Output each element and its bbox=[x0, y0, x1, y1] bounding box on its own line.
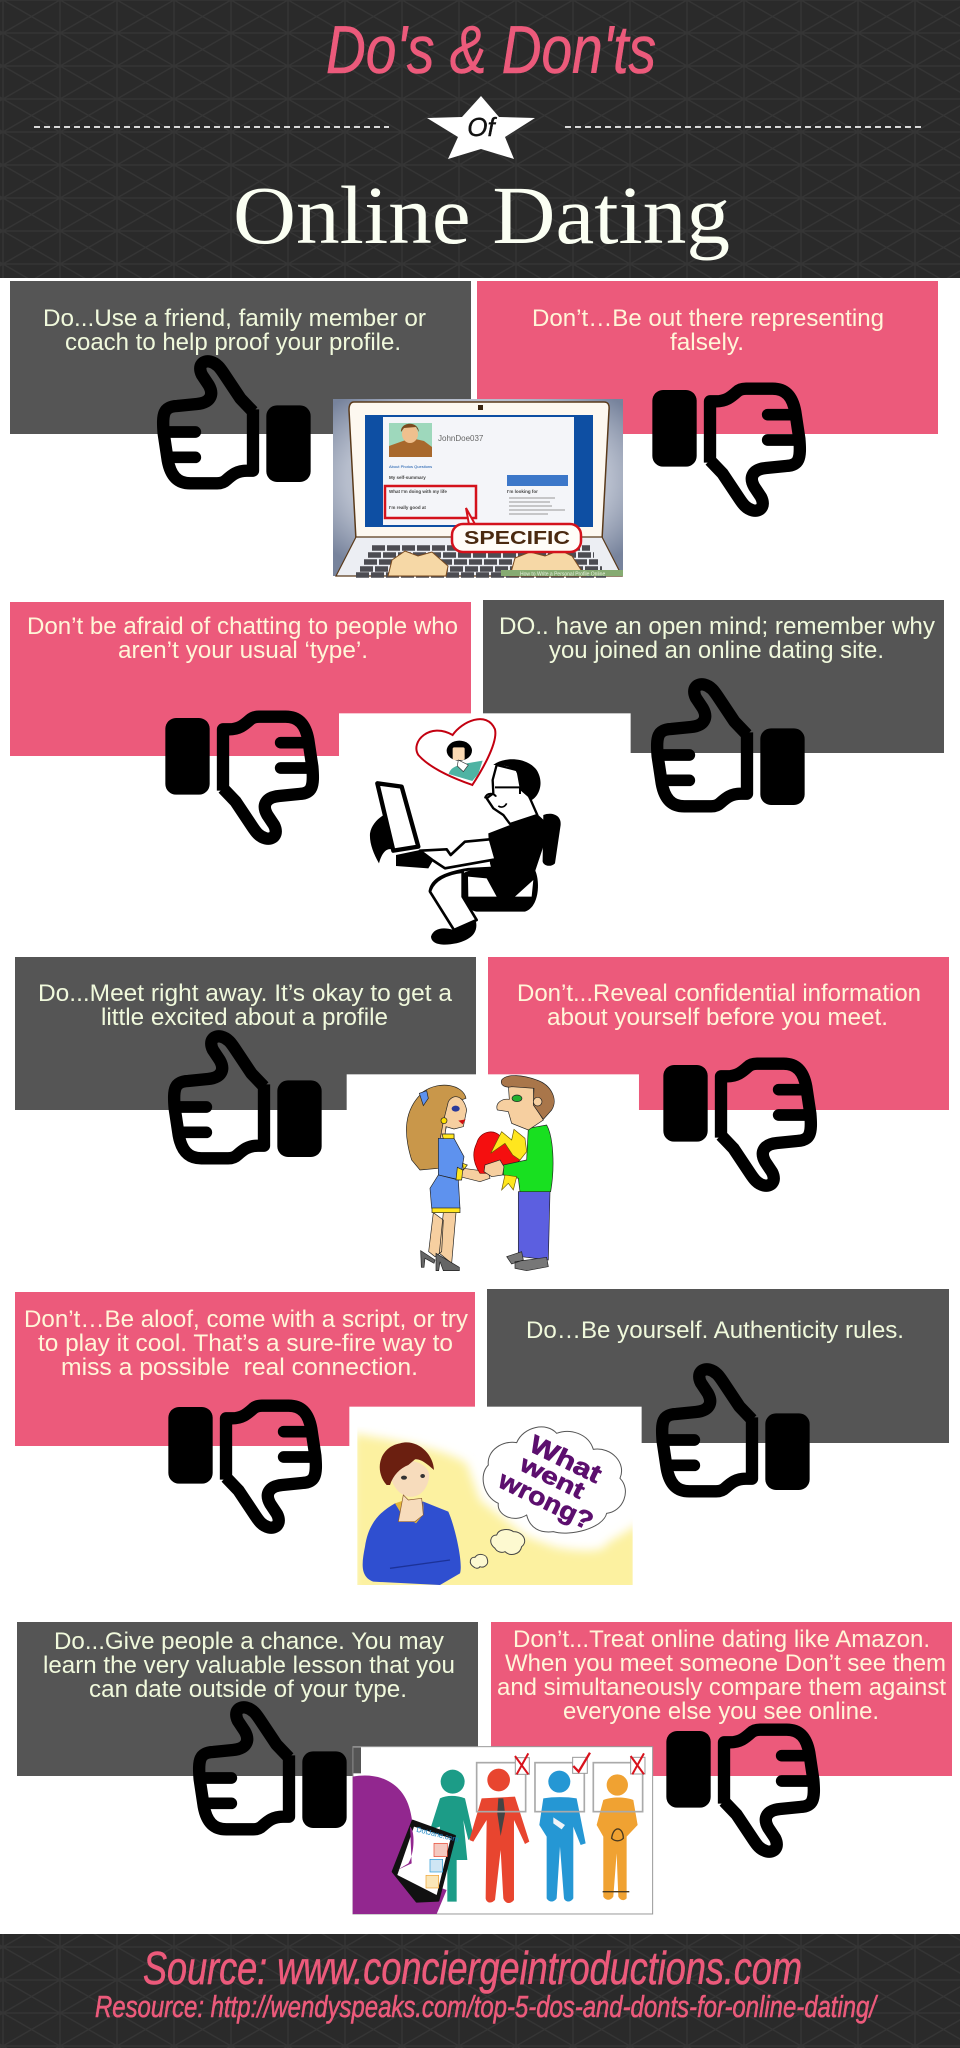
illustration: laptop with profile: My self-summary bbox=[389, 475, 426, 480]
illustration: couple exchanging a heart gift bbox=[347, 1074, 639, 1274]
panel: don't, be aloof bbox=[15, 1292, 475, 1446]
panel: don't, representing falsely: Don’t…Be out there representing bbox=[532, 305, 884, 332]
illustration: laptop with profile: I'm really good at bbox=[389, 505, 426, 510]
panel: do, give people a chance: can date outside of your type. bbox=[89, 1676, 407, 1703]
panel: don't, confidential information: Don’t...Reveal confidential information bbox=[517, 980, 921, 1007]
icon: thumbs down bbox=[663, 1064, 811, 1186]
panel: do, meet right away: little excited about a profile bbox=[101, 1004, 388, 1031]
icon: thumbs down bbox=[168, 1406, 316, 1528]
illustration: thinking man, what went wrong: went bbox=[515, 1450, 589, 1504]
panel: do, open mind: DO.. have an open mind; remember why bbox=[499, 613, 935, 640]
panel: don't, chatting: Don’t be afraid of chatting to people who bbox=[27, 613, 458, 640]
row 3 bbox=[15, 957, 949, 1274]
star badge with Of bbox=[427, 96, 535, 159]
panel: do, open mind: you joined an online dating site. bbox=[549, 637, 884, 664]
illustration: thinking man, what went wrong: wrong? bbox=[493, 1466, 598, 1536]
illustration: laptop with profile: What I'm doing with my life bbox=[389, 489, 447, 494]
panel: don't, representing falsely: falsely. bbox=[670, 329, 744, 356]
illustration: thinking man, what went wrong bbox=[349, 1407, 642, 1593]
illustration: laptop with profile: I'm looking for bbox=[507, 489, 538, 494]
icon: thumbs down bbox=[666, 1730, 814, 1852]
title: Online Dating: Online Dating bbox=[233, 169, 730, 261]
panel: don't, representing falsely bbox=[477, 281, 938, 434]
panel: don't, treat dating like Amazon: everyone else you see online. bbox=[563, 1698, 879, 1725]
panel: do, proof your profile bbox=[10, 281, 471, 434]
illustration: man at computer dreaming of a date bbox=[339, 713, 631, 947]
row 5 bbox=[17, 1622, 952, 1914]
icon: thumbs down bbox=[652, 389, 800, 511]
panel: don't, treat dating like Amazon: Don’t...Treat online dating like Amazon. bbox=[513, 1626, 930, 1653]
panel: do, give people a chance: Do...Give people a chance. You may bbox=[54, 1628, 444, 1655]
title: Do's & Don'ts: Do's & Don'ts bbox=[326, 12, 656, 88]
panel: don't, chatting: aren’t your usual ‘type’. bbox=[118, 637, 368, 664]
panel: do, be yourself: Do…Be yourself. Authenticity rules. bbox=[526, 1317, 904, 1344]
header band bbox=[0, 0, 960, 278]
left dashed divider bbox=[34, 126, 389, 128]
star badge with Of: Of bbox=[467, 112, 497, 142]
panel: do, proof your profile: coach to help proof your profile. bbox=[65, 329, 401, 356]
right dashed divider bbox=[565, 126, 922, 128]
panel: don't, be aloof: Don’t…Be aloof, come with a script, or try bbox=[24, 1306, 468, 1333]
illustration: choosing people on a tablet bbox=[353, 1747, 653, 1914]
panel: don't, confidential information bbox=[488, 957, 949, 1110]
panel: do, be yourself bbox=[487, 1289, 949, 1443]
source line: Source: www.conciergeintroductions.com bbox=[143, 1942, 802, 1994]
panel: do, meet right away: Do...Meet right away. It’s okay to get a bbox=[38, 980, 453, 1007]
icon: thumbs down bbox=[165, 717, 313, 839]
row 2 bbox=[10, 600, 944, 947]
icon: thumbs up bbox=[662, 1369, 810, 1491]
footer band bbox=[0, 1934, 960, 2048]
panel: do, proof your profile: Do...Use a friend, family member or bbox=[43, 305, 426, 332]
icon: thumbs up bbox=[657, 684, 805, 806]
illustration: laptop with profile: How to Write a Personal Profile Online bbox=[520, 572, 605, 578]
icon: thumbs up bbox=[174, 1036, 322, 1158]
illustration: laptop with profile: SPECIFIC bbox=[464, 528, 570, 548]
panel: do, give people a chance: learn the very valuable lesson that you bbox=[43, 1652, 455, 1679]
panel: don't, treat dating like Amazon: When you meet someone Don’t see them bbox=[505, 1650, 946, 1677]
panel: don't, chatting bbox=[10, 602, 471, 756]
illustration: laptop with profile bbox=[333, 399, 623, 578]
row 4 bbox=[15, 1289, 949, 1593]
illustration: laptop with profile: JohnDoe037 bbox=[438, 434, 484, 443]
panel: don't, treat dating like Amazon: and simultaneously compare them against bbox=[497, 1674, 946, 1701]
panel: do, give people a chance bbox=[17, 1622, 478, 1776]
panel: don't, be aloof: to play it cool. That’s a sure-fire way to bbox=[38, 1330, 453, 1357]
illustration: laptop with profile: About Photos Questions bbox=[389, 464, 432, 469]
icon: thumbs up bbox=[199, 1707, 347, 1829]
panel: don't, confidential information: about yourself before you meet. bbox=[547, 1004, 888, 1031]
illustration: choosing people on a tablet: DotJane.com bbox=[416, 1825, 460, 1844]
illustration: thinking man, what went wrong: What bbox=[525, 1430, 606, 1489]
row 1 bbox=[10, 281, 938, 578]
panel: don't, be aloof: miss a possible real connection. bbox=[61, 1354, 418, 1381]
panel: do, meet right away bbox=[15, 957, 476, 1110]
panel: don't, treat dating like Amazon bbox=[491, 1622, 952, 1776]
icon: thumbs up bbox=[163, 361, 311, 483]
panel: do, open mind bbox=[483, 600, 944, 753]
